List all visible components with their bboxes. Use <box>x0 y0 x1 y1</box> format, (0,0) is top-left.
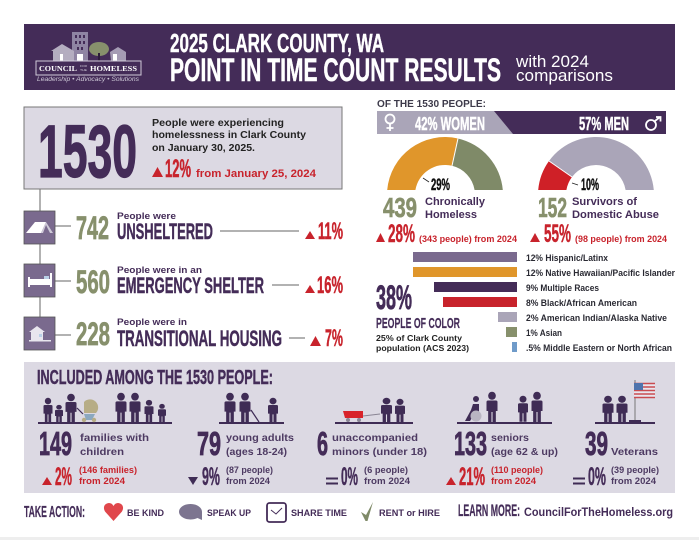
row: transitional housing: 7% <box>325 325 343 352</box>
heading: INCLUDED AMONG THE 1530 PEOPLE: <box>37 367 273 389</box>
icon: veterans and flag <box>595 380 655 424</box>
logo: Council for the Homeless: COUNCIL <box>39 64 77 73</box>
group: unaccompanied minors: minors (under 18) <box>332 446 427 458</box>
stat: chronically homeless <box>376 192 517 248</box>
footer: take action: BE KIND <box>127 508 164 519</box>
row: transitional housing: 228 <box>76 316 110 352</box>
footer: take action: SPEAK UP <box>207 508 252 519</box>
group: veterans: (39 people) <box>611 465 659 475</box>
group: seniors: (age 62 & up) <box>491 446 558 458</box>
row: unsheltered: UNSHELTERED <box>117 219 213 244</box>
group: unaccompanied minors: 6 <box>317 425 328 462</box>
group: young adults: (87 people) <box>226 465 273 475</box>
group: seniors: from 2024 <box>491 476 536 486</box>
group: unaccompanied minors: 0% <box>341 463 358 491</box>
donut: domestic abuse 10% <box>538 137 654 194</box>
bar chart: people of color by race: 2% American Indian/Alaska Native <box>526 313 667 323</box>
group: seniors: 133 <box>454 425 487 462</box>
icon: wagon and minors <box>335 398 413 424</box>
bar chart: people of color by race: 12% Native Hawaiian/Pacific Islander <box>526 268 675 278</box>
row: transitional housing: TRANSITIONAL HOUSING <box>117 326 282 351</box>
group: unaccompanied minors: unaccompanied <box>332 432 418 444</box>
stat: chronically homeless: Chronically <box>425 196 486 208</box>
title: with 2024 <box>515 53 589 71</box>
group: young adults: 9% <box>202 463 220 491</box>
learn more: CouncilForTheHomeless.org <box>524 507 673 519</box>
row: emergency shelter: EMERGENCY SHELTER <box>117 273 264 298</box>
logo: Council for the Homeless: HOMELESS <box>90 64 137 73</box>
group: families with children: (146 families) <box>79 465 137 475</box>
icon: female symbol <box>386 114 394 131</box>
footer: take action: RENT or HIRE <box>379 508 440 519</box>
group: seniors: seniors <box>491 432 529 444</box>
row: transitional housing <box>24 297 343 352</box>
icon: house <box>24 317 55 350</box>
icon: heart <box>104 503 123 521</box>
learn more: LEARN MORE: <box>458 501 520 520</box>
panel: total count 1530: 12% <box>165 155 191 183</box>
stat: chronically homeless: 439 <box>383 192 417 223</box>
row: emergency shelter: People were in an <box>117 265 202 275</box>
panel: total count 1530: People were experiencing <box>152 118 284 129</box>
title <box>170 28 613 88</box>
group: veterans: from 2024 <box>611 476 656 486</box>
group: veterans: 39 <box>585 425 608 462</box>
group: young adults: 79 <box>197 425 221 462</box>
panel: total count 1530: from January 25, 2024 <box>196 168 317 180</box>
group: young adults: from 2024 <box>226 476 270 486</box>
footer: take action: TAKE ACTION: <box>24 504 85 521</box>
icon: young adults <box>219 393 284 424</box>
panel: total count 1530: homelessness in Clark County <box>152 130 306 141</box>
group: young adults <box>188 393 294 491</box>
footer: take action: SHARE TIME <box>291 508 347 519</box>
title: comparisons <box>516 67 613 85</box>
stat: survivors of domestic abuse: Domestic Abuse <box>572 209 659 221</box>
learn more <box>458 501 673 520</box>
stat: chronically homeless: 28% <box>388 220 415 248</box>
row: emergency shelter <box>24 244 343 300</box>
row: emergency shelter: 16% <box>317 272 343 299</box>
row: unsheltered: 742 <box>76 210 109 246</box>
panel: total count 1530: 1530 <box>38 110 137 193</box>
header banner <box>24 24 675 90</box>
bar chart: people of color by race: 1% Asian <box>526 328 562 338</box>
row: unsheltered: 11% <box>318 218 343 245</box>
stat: survivors of domestic abuse: 55% <box>544 220 571 248</box>
heading: of the 1530 people: OF THE 1530 PEOPLE: <box>377 99 486 110</box>
group: seniors: 21% <box>459 463 485 491</box>
row: unsheltered <box>24 210 343 246</box>
group: families with children <box>38 393 172 491</box>
panel: included among the 1530 people <box>24 362 675 493</box>
stat: 38% people of color: 25% of Clark County <box>376 333 462 343</box>
icon: tent <box>24 211 55 244</box>
group: unaccompanied minors: from 2024 <box>364 476 410 486</box>
panel: total count 1530: on January 30, 2025. <box>152 143 255 154</box>
group: families with children: families with <box>80 432 149 444</box>
group: young adults: young adults <box>226 432 294 444</box>
panel: total count 1530 <box>24 107 342 193</box>
logo: Council for the Homeless: Leadership • Advocacy • Solutions <box>37 77 139 83</box>
stat: chronically homeless: Homeless <box>425 209 477 221</box>
stat: survivors of domestic abuse: Survivors of <box>572 196 637 208</box>
gender bar: 42% WOMEN <box>415 114 485 134</box>
bar chart: people of color by race: .5% Middle Eastern or North African <box>526 343 672 353</box>
stat: survivors of domestic abuse: (98 people) from 2024 <box>575 234 667 244</box>
row: transitional housing: People were in <box>117 317 187 327</box>
gender bar: 57% MEN <box>579 114 629 134</box>
group: young adults: (ages 18-24) <box>226 446 287 458</box>
logo: Council for the Homeless: FOR <box>80 64 88 68</box>
stat: 38% people of color: population (ACS 2023) <box>376 343 469 353</box>
stat: 38% people of color: 38% <box>376 279 412 317</box>
group: unaccompanied minors: (6 people) <box>364 465 408 475</box>
logo: Council for the Homeless: THE <box>80 68 87 72</box>
group: veterans <box>573 380 659 491</box>
icon: seniors and wheelchair <box>457 392 552 424</box>
stat: chronically homeless: (343 people) from 2024 <box>419 234 517 244</box>
icon: clock <box>267 503 286 522</box>
group: seniors <box>446 392 558 491</box>
donut: chronically homeless 29%: 29% <box>431 175 450 194</box>
row: emergency shelter: 560 <box>76 264 110 300</box>
stat: survivors of domestic abuse <box>530 192 667 248</box>
bar chart: people of color by race <box>413 252 675 353</box>
group: seniors: (110 people) <box>491 465 543 475</box>
group: families with children: from 2024 <box>79 476 125 486</box>
icon: check mark <box>361 502 373 521</box>
group: families with children: children <box>80 446 124 458</box>
title: 2025 CLARK COUNTY, WA <box>170 28 384 58</box>
logo: Council for the Homeless <box>36 32 141 83</box>
group: families with children: 2% <box>55 463 72 491</box>
bar chart: people of color by race: 8% Black/African American <box>526 298 637 308</box>
group: families with children: 149 <box>39 425 72 462</box>
group: veterans: 0% <box>588 463 606 491</box>
icon: families and stroller <box>38 393 172 424</box>
icon: speech bubble <box>179 504 202 520</box>
icon: bed <box>24 264 55 297</box>
icon: male symbol <box>646 117 660 130</box>
stat: 38% people of color: PEOPLE OF COLOR <box>376 315 460 332</box>
stat: 38% people of color <box>376 279 469 353</box>
connector spine <box>39 189 41 320</box>
group: unaccompanied minors <box>317 398 427 491</box>
bar chart: people of color by race: 9% Multiple Races <box>526 283 599 293</box>
title: POINT IN TIME COUNT RESULTS <box>170 52 501 88</box>
group: veterans: Veterans <box>611 446 658 458</box>
footer: take action <box>24 501 673 522</box>
donut: domestic abuse 10%: 10% <box>581 175 599 194</box>
row: unsheltered: People were <box>117 211 176 221</box>
bar chart: people of color by race: 12% Hispanic/Latinx <box>526 253 608 263</box>
donut: chronically homeless 29% <box>387 137 503 194</box>
stat: survivors of domestic abuse: 152 <box>538 192 567 223</box>
gender bar <box>377 111 666 134</box>
